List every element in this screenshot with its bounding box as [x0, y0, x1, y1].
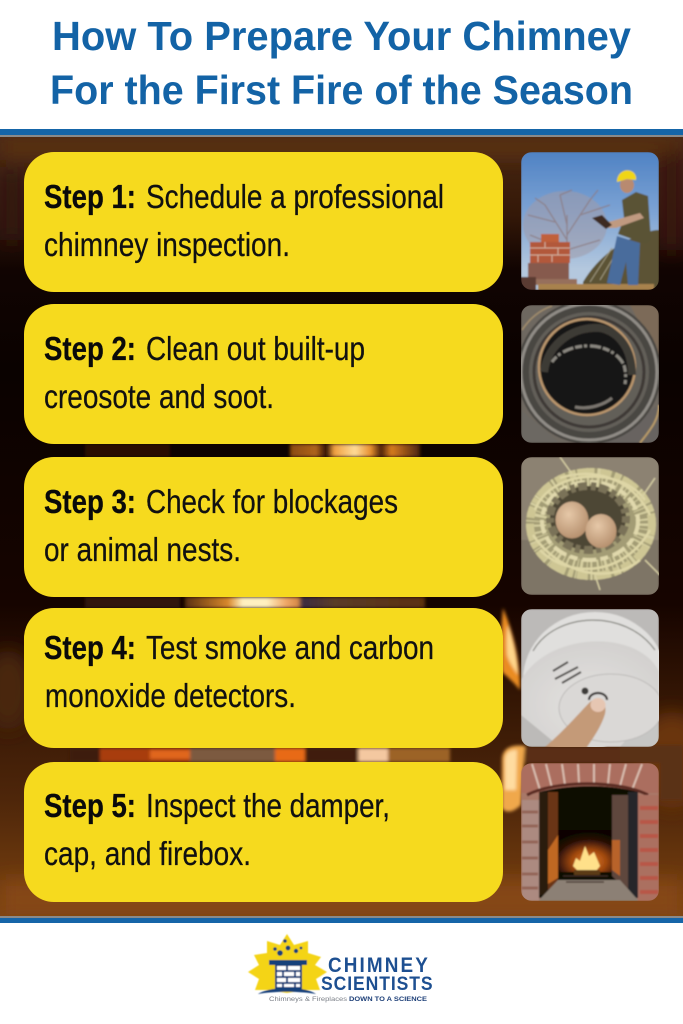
panel: step 1: chimney inspection.: [44, 226, 290, 263]
panel: step 5: cap, and firebox.: [44, 835, 251, 872]
panel: step 5: Inspect the damper,: [146, 787, 390, 824]
photo: creosote-coated flue: [517, 300, 661, 444]
panel: step 1: Step 1:: [44, 178, 136, 215]
title: [50, 13, 633, 113]
panel: step 2: Step 2:: [44, 330, 136, 367]
logo wordmark: SCIENTISTS: [321, 972, 433, 994]
logo: Chimney Scientists: [248, 934, 433, 1003]
panel: step 2: creosote and soot.: [44, 378, 274, 415]
logo tagline: Chimneys & Fireplaces: [269, 996, 348, 1003]
title: How To Prepare Your Chimney: [52, 13, 631, 59]
panel: step 3: Check for blockages: [146, 483, 398, 520]
panel: step 4: Test smoke and carbon: [146, 629, 434, 666]
gap 2-3: [85, 444, 170, 457]
panel: step 3: or animal nests.: [44, 531, 241, 568]
background photo: fire in hearth: [0, 137, 683, 920]
panel: step 4: monoxide detectors.: [45, 677, 296, 714]
top blue divider: [0, 129, 683, 137]
logo tagline: [269, 996, 428, 1003]
side flames: [501, 608, 520, 690]
photo: inspector on roof: [521, 152, 659, 290]
logo tagline: DOWN TO A SCIENCE: [349, 996, 428, 1003]
logo wordmark: [321, 954, 433, 994]
photo: smoke detector being tested: [521, 609, 667, 750]
panel: step 2: Clean out built-up: [146, 330, 365, 367]
logo wordmark: CHIMNEY: [328, 954, 428, 977]
panel: step 4: Step 4:: [44, 629, 136, 666]
photo: bird nest with eggs: [521, 457, 660, 595]
panel: step 5: Step 5:: [44, 787, 136, 824]
title: For the First Fire of the Season: [50, 67, 633, 113]
panel: step 5: [24, 762, 503, 902]
icon: starburst with chimney: [248, 934, 327, 994]
gap 3-4: [85, 597, 180, 608]
panel: step 1: Schedule a professional: [146, 178, 444, 215]
panel: step 4: [24, 608, 503, 748]
panel: step 3: [24, 457, 503, 597]
photo: brick fireplace with fire: [521, 763, 659, 901]
bottom blue divider: [0, 916, 683, 923]
panel: step 1: [24, 152, 503, 292]
panel: step 2: [24, 304, 503, 444]
gap 4-5: [70, 748, 105, 762]
panel: step 3: Step 3:: [44, 483, 136, 520]
